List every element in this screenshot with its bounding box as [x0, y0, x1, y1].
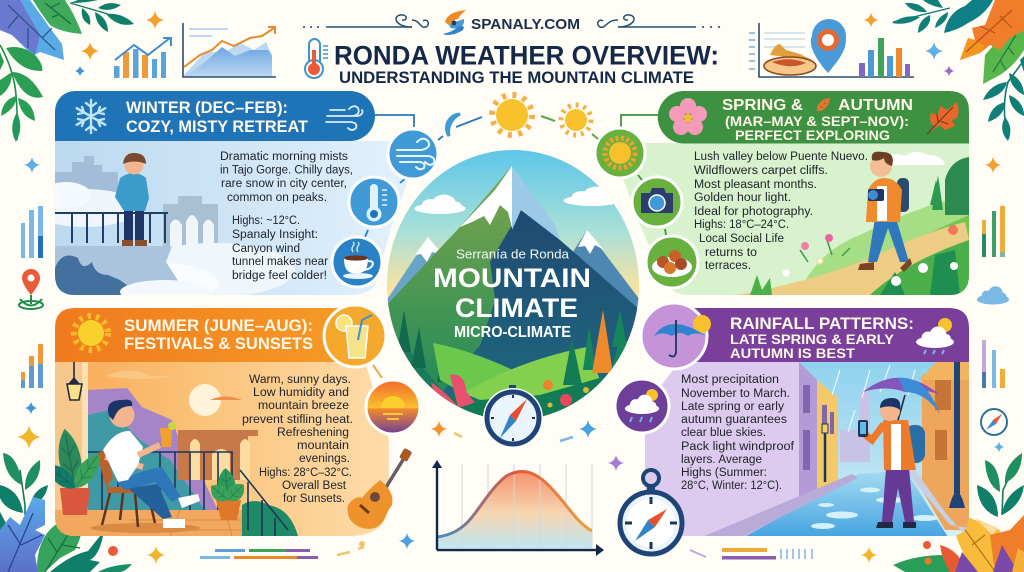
- summer text block: mountain breeze: [258, 400, 349, 412]
- rainfall text block: Late spring or early: [681, 401, 784, 413]
- spring text block: Lush valley below Puente Nuevo.: [694, 151, 868, 163]
- panel: rainfall: [645, 308, 969, 542]
- summer text block: Warm, sunny days.: [249, 374, 351, 386]
- rainfall heading: AUTUMN IS BEST: [730, 345, 855, 361]
- summer text block: Refreshening: [277, 427, 349, 439]
- winter text block: in Tajo Gorge. Chilly days,: [220, 165, 353, 177]
- summer text block: Highs: 28°C–32°C.: [259, 467, 352, 479]
- boy in blue jacket: [115, 153, 149, 246]
- summer heading: SUMMER (JUNE–AUG):: [124, 316, 313, 335]
- rainfall scene: wet street with umbrella: [690, 362, 969, 542]
- centre caption: MOUNTAIN: [433, 263, 591, 293]
- spring text block: Golden hour light.: [694, 192, 791, 204]
- rainfall text block: autumn guarantees: [681, 414, 787, 426]
- foliage: top right corner: [892, 0, 1024, 141]
- summer heading: [124, 316, 313, 353]
- winter text block: Highs: ~12°C.: [232, 215, 300, 227]
- spring text block: Highs: 18°C–24°C.: [694, 219, 789, 231]
- icon: guitar: [348, 448, 412, 529]
- spring text block: Ideal for photography.: [694, 206, 813, 218]
- summer panel background: [55, 362, 389, 536]
- spring heading: PERFECT EXPLORING: [735, 127, 890, 143]
- icon circle: sun: [595, 128, 645, 178]
- icon circle: umbrella: [641, 303, 711, 369]
- icon circle: thermometer: [349, 177, 399, 227]
- rainfall text block: [681, 374, 795, 492]
- spring text block: returns to: [705, 247, 757, 259]
- icon circle: sunset: [366, 380, 420, 434]
- icon circle: tapas plate: [646, 236, 698, 288]
- winter text block: bridge feel colder!: [232, 270, 327, 282]
- foliage: top left corner: [0, 0, 134, 142]
- brand name: SPANALY.COM: [471, 16, 580, 33]
- winter panel background: [55, 141, 412, 295]
- man with umbrella and phone: [858, 378, 940, 528]
- icon: compass: [483, 385, 543, 448]
- icon circle: lemonade: [324, 305, 386, 367]
- spring text block: terraces.: [705, 260, 751, 272]
- spring heading: [722, 97, 913, 143]
- winter heading: [126, 98, 309, 136]
- icon: pink flower: [669, 98, 707, 135]
- summer text block: mountain: [297, 440, 349, 452]
- rainfall text block: Pack light windproof: [681, 441, 795, 453]
- title: RONDA WEATHER OVERVIEW:: [334, 40, 719, 70]
- winter heading: COZY, MISTY RETREAT: [126, 117, 309, 136]
- icon circle: coffee cup: [332, 237, 382, 287]
- spring header bar: [658, 91, 969, 144]
- summer text block: Overall Best: [282, 480, 347, 492]
- panel: winter: [55, 91, 408, 295]
- spring heading: AUTUMN: [838, 97, 913, 114]
- icon: map pin left: [19, 269, 43, 309]
- summer text block: Low humidity and: [253, 387, 349, 399]
- icon circle: camera: [632, 177, 682, 227]
- connector: winter to circle icons: [365, 115, 414, 237]
- header: brand line with logo: [304, 10, 719, 35]
- spring panel background: [620, 143, 969, 295]
- centre caption: [433, 246, 591, 341]
- spring heading: SPRING &: [722, 97, 803, 114]
- summer text block: evenings.: [299, 453, 350, 465]
- icon: pocket compass: [620, 470, 682, 554]
- panel: spring and autumn: [620, 91, 969, 295]
- spring text block: Most pleasant months.: [694, 179, 817, 191]
- central mountain circle: [387, 150, 639, 416]
- spring heading: (MAR–MAY & SEPT–NOV):: [725, 113, 909, 129]
- winter text block: Canyon wind: [232, 243, 300, 255]
- hiker with camera: [858, 152, 912, 272]
- winter text block: rare snow in city center,: [221, 178, 347, 190]
- centre caption: CLIMATE: [455, 293, 578, 323]
- centre caption: MICRO-CLIMATE: [454, 324, 571, 341]
- chart icon: rising bars: [114, 38, 171, 78]
- spring text block: [694, 151, 868, 272]
- spring text block: Wildflowers carpet cliffs.: [694, 165, 828, 177]
- winter text block: Dramatic morning mists: [220, 151, 348, 163]
- icon: wind in header: [326, 106, 362, 130]
- sun path: suns and crescent: [438, 95, 598, 140]
- centre caption: Serranía de Ronda: [456, 246, 570, 262]
- icon: cloud with rain in header: [916, 318, 954, 354]
- summer text block: [242, 374, 353, 505]
- icon: snowflake: [77, 100, 105, 133]
- winter header bar: [55, 91, 375, 141]
- summer header bar: [55, 308, 350, 362]
- foliage: bottom right corner: [893, 453, 1024, 572]
- terrace plants: [42, 427, 249, 520]
- summer heading: FESTIVALS & SUNSETS: [124, 334, 313, 353]
- winter heading: WINTER (DEC–FEB):: [126, 98, 288, 117]
- seated man with drink: [97, 400, 200, 528]
- connector: summer circles: [373, 365, 382, 378]
- spring text block: Local Social Life: [699, 233, 784, 245]
- connector: spring to circle icons: [621, 115, 666, 235]
- winter scene: misty gorge with boy: [55, 153, 295, 295]
- logo icon: [443, 10, 466, 35]
- winter text block: tunnel makes near: [232, 256, 328, 268]
- spring scene: hiker on path: [735, 152, 969, 295]
- chart icon: plate, map pin and bars: [749, 19, 914, 77]
- rainfall heading: [730, 314, 914, 361]
- summer text block: prevent stifling heat.: [242, 414, 353, 426]
- foliage: bottom left corner: [0, 453, 132, 572]
- rainfall heading: LATE SPRING & EARLY: [730, 331, 895, 347]
- chart icon: area chart: [183, 23, 276, 77]
- panel: summer: [42, 308, 389, 536]
- rainfall text block: 28°C, Winter: 12°C).: [681, 480, 782, 492]
- winter text block: Spanaly Insight:: [232, 229, 318, 241]
- chart: temperature bell curve: [432, 460, 604, 556]
- icon: thermometer in title: [305, 39, 328, 78]
- subtitle: UNDERSTANDING THE MOUNTAIN CLIMATE: [339, 68, 694, 87]
- rainfall panel background: [645, 362, 969, 536]
- rainfall header bar: [689, 308, 969, 362]
- rainfall text block: layers. Average: [681, 454, 762, 466]
- icon circle: wind: [388, 129, 438, 179]
- rainfall heading: RAINFALL PATTERNS:: [730, 314, 914, 333]
- rainfall text block: Highs (Summer:: [681, 467, 767, 479]
- rainfall text block: Most precipitation: [681, 374, 779, 386]
- icon: small compass right: [981, 409, 1007, 435]
- icon: small autumn leaf: [814, 96, 832, 114]
- rainfall text block: clear blue skies.: [681, 427, 766, 439]
- summer scene: terrace at sunset: [42, 362, 298, 536]
- winter text block: common on peaks.: [227, 192, 327, 204]
- icon: autumn leaf: [927, 102, 958, 134]
- icon: lantern: [67, 362, 82, 400]
- icon circle: rain cloud: [615, 379, 669, 433]
- icon: summer sun: [74, 316, 108, 350]
- summer text block: for Sunsets.: [283, 493, 345, 505]
- winter text block: [220, 151, 353, 282]
- rainfall text block: November to March.: [681, 388, 790, 400]
